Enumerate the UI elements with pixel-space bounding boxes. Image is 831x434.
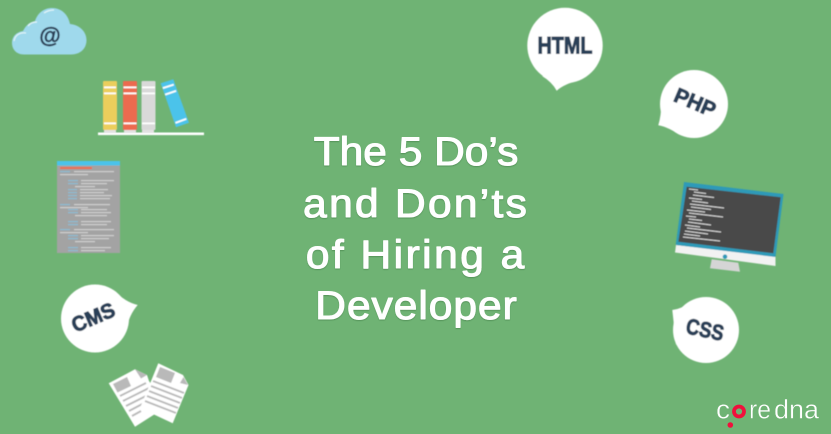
title: and Don’ts [303, 181, 527, 226]
monitor screen [678, 187, 781, 253]
yellow book [103, 81, 117, 130]
left document [109, 369, 166, 427]
title: Developer [315, 283, 517, 328]
logo: core dna [716, 394, 820, 428]
icon: books on shelf [98, 79, 204, 135]
monitor chin [675, 245, 776, 266]
leaning blue book [161, 79, 189, 127]
speech bubble: CMS [61, 284, 138, 352]
icon: paper documents [109, 363, 188, 427]
speech bubble: PHP [658, 70, 728, 138]
icon: cloud with at sign: @ [39, 23, 61, 48]
monitor frame [676, 182, 784, 257]
logo: core dna: dna [774, 394, 820, 424]
logo: core dna: c [716, 394, 730, 424]
speech bubble: CSS: CSS [684, 313, 726, 346]
title: The 5 Do’s [314, 129, 518, 174]
grey book [142, 81, 156, 130]
right document [140, 363, 188, 423]
speech bubble: PHP: PHP [671, 84, 719, 122]
speech bubble: CSS [672, 297, 739, 363]
title: of Hiring a [306, 232, 524, 277]
monitor stand [710, 259, 740, 272]
speech bubble: CMS: CMS [68, 299, 119, 337]
icon: desktop monitor with code [675, 182, 784, 272]
icon: code listing [57, 161, 120, 253]
title [303, 129, 527, 328]
speech bubble: HTML: HTML [538, 32, 592, 60]
red book [123, 81, 137, 130]
icon: cloud with at sign [12, 8, 86, 54]
speech bubble: HTML [527, 8, 603, 91]
logo: core dna: re [749, 394, 771, 424]
